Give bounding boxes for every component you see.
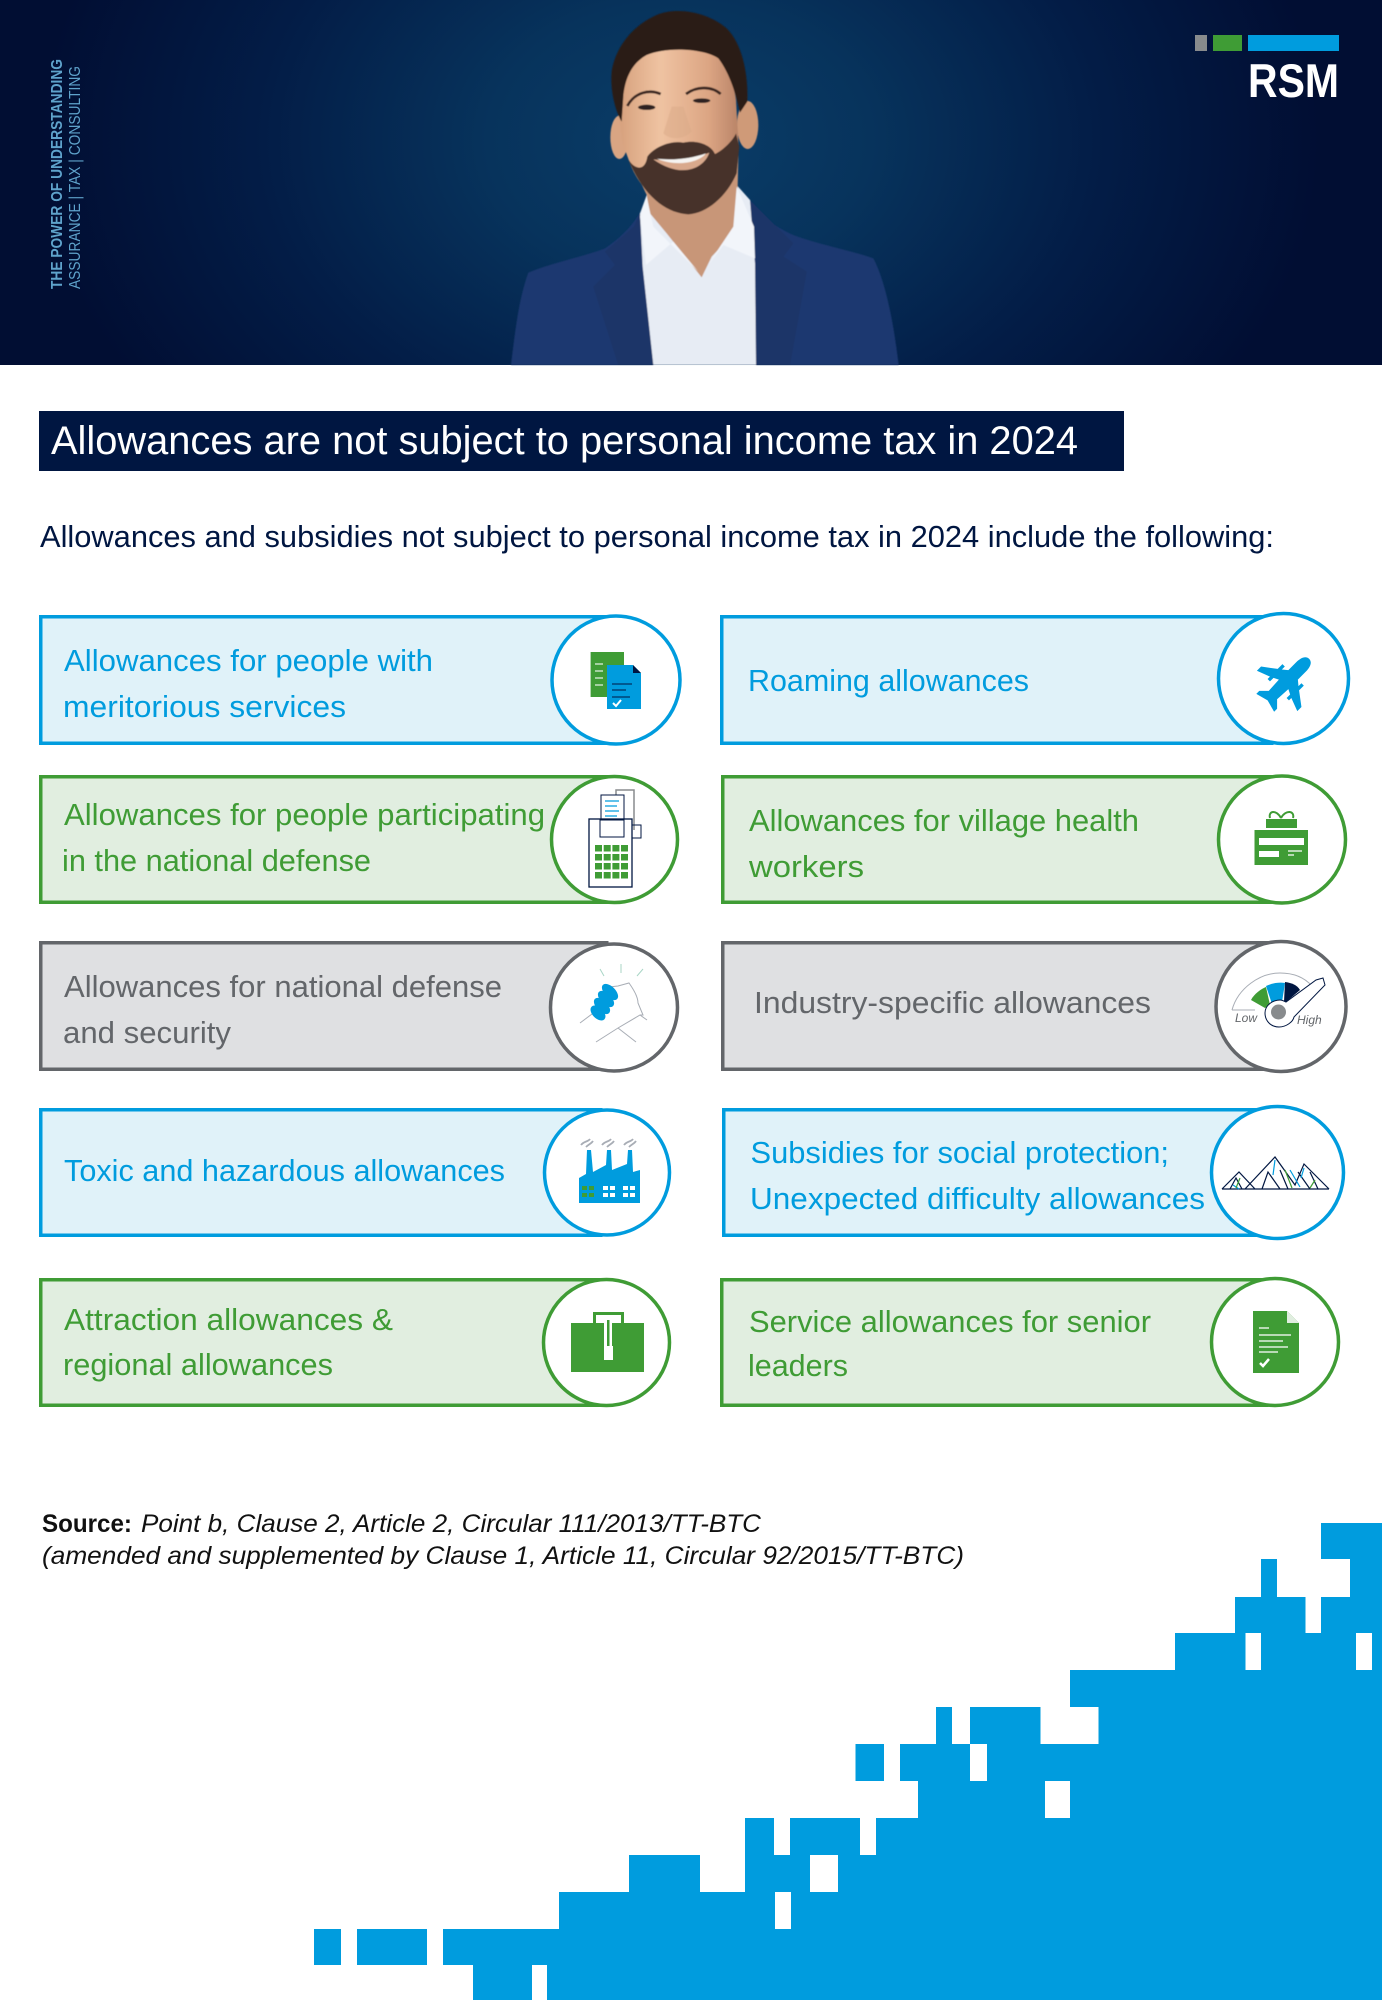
icon: documents [591,652,641,709]
icon: gauge: Low [1235,1011,1258,1025]
panel: roaming: Roaming allowances [748,663,1029,698]
panel: national defense participants: in the national defense [62,843,371,878]
RSM logo: RSM [1248,54,1339,107]
panel: attraction and regional: Attraction allowances & [64,1302,393,1337]
source note: Source: [42,1510,132,1538]
header banner [0,0,1382,365]
icon: document with check [1253,1311,1299,1373]
panel: meritorious services: Allowances for people with [64,643,433,678]
vertical tagline [49,59,84,289]
panel: senior leaders: leaders [748,1348,848,1383]
panel: village health workers: workers [748,849,864,884]
icon: gauge [1232,973,1325,1027]
source note [42,1510,964,1570]
panel: subsidies and difficulty: Unexpected difficulty allowances [750,1181,1205,1216]
icon: briefcase [571,1314,644,1372]
icon: gift and card [1254,812,1308,865]
panel: attraction and regional: regional allowances [63,1347,333,1382]
icon: gauge: High [1297,1013,1322,1027]
panel: subsidies and difficulty [724,1106,1344,1238]
icon: airplane [1245,639,1329,723]
panel: national defense and security: Allowances for national defense [64,969,502,1004]
vertical tagline: THE POWER OF UNDERSTANDING [49,59,66,289]
panel: meritorious services [41,616,680,744]
photo: smiling man in navy blazer [511,11,899,365]
panel: meritorious services: meritorious services [63,689,346,724]
RSM logo [1195,35,1339,107]
source note: (amended and supplemented by Clause 1, Article 11, Circular 92/2015/TT-BTC) [42,1542,964,1570]
icon: calculator [589,790,641,887]
decorative blue staircase [314,1523,1382,2000]
panel: senior leaders: Service allowances for senior [749,1304,1151,1339]
panel: senior leaders [722,1278,1338,1406]
panel: industry-specific [723,942,1346,1072]
title [39,411,1124,471]
source note: Point b, Clause 2, Article 2, Circular 111/2013/TT-BTC [141,1510,762,1538]
vertical tagline: ASSURANCE | TAX | CONSULTING [67,66,84,289]
panel: national defense and security: and security [63,1015,232,1050]
panel: village health workers [723,776,1346,903]
intro text: Allowances and subsidies not subject to personal income tax in 2024 include the following: [40,519,1274,554]
title: Allowances are not subject to personal income tax in 2024 [51,419,1078,463]
panel: national defense participants [41,776,678,902]
icon: handshake [580,964,647,1042]
panel: toxic and hazardous: Toxic and hazardous allowances [64,1153,505,1188]
panel: toxic and hazardous [41,1110,670,1235]
panel: village health workers: Allowances for village health [749,803,1139,838]
panel: attraction and regional [41,1280,670,1406]
panel: national defense participants: Allowances for people participating [64,797,545,832]
panel: roaming [722,614,1348,744]
panel: subsidies and difficulty: Subsidies for social protection; [750,1135,1169,1170]
panel: industry-specific: Industry-specific allowances [754,985,1151,1020]
icon: factory [579,1139,640,1203]
icon: mountains [1222,1157,1329,1189]
panel: national defense and security [41,943,678,1071]
